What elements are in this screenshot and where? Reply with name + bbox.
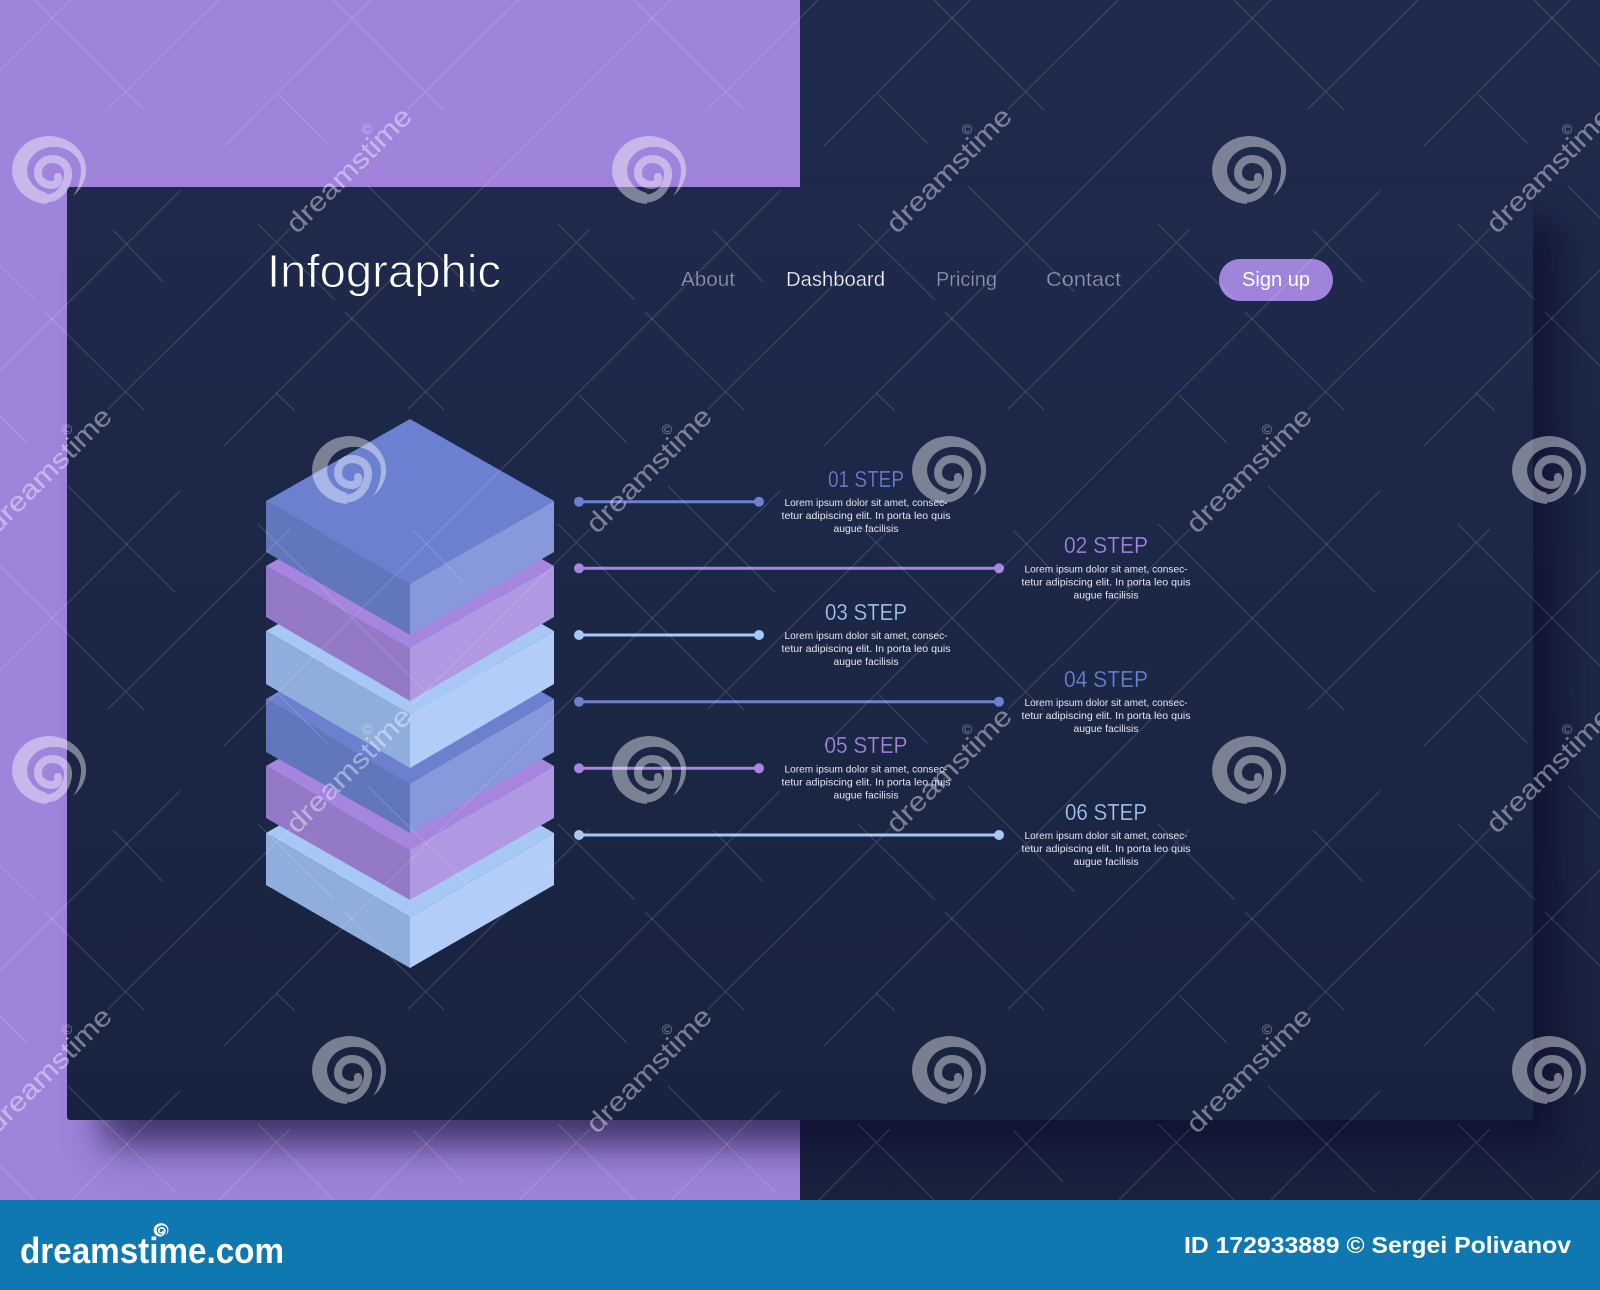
step 01: tetur adipiscing elit. In porta leo quis [782,510,950,522]
layer 1 [266,419,554,635]
step 05: Lorem ipsum dolor sit amet, consec- [784,764,948,776]
step 02: augue facilisis [1074,590,1138,602]
watermark: dreamstime text: dreamstime [1180,1001,1318,1139]
step 02: 02 STEP [1064,532,1148,558]
watermark: dreamstime text: dreamstime [880,701,1018,839]
step 03: 03 STEP [825,599,907,625]
watermark: dreamstime text: dreamstime [1480,101,1600,239]
step 04: augue facilisis [1074,723,1138,735]
step 06 [574,799,1190,868]
step 01 [574,466,950,535]
isometric layer stack [266,419,554,968]
step 03: tetur adipiscing elit. In porta leo quis [782,643,950,655]
watermark: dreamstime text: dreamstime [1480,701,1600,839]
step 06: augue facilisis [1074,856,1138,868]
watermark: dreamstime text: © [362,721,373,737]
navigation menu: About [681,269,735,291]
layer 6 [266,750,554,968]
watermark: dreamstime text: © [62,421,73,437]
watermark: dreamstime text: © [1262,1021,1273,1037]
step 04: tetur adipiscing elit. In porta leo quis [1022,710,1190,722]
step 06: tetur adipiscing elit. In porta leo quis [1022,843,1190,855]
watermark: dreamstime text: dreamstime [1180,401,1318,539]
layer 5 [266,683,554,900]
step 03 [574,599,950,668]
watermark: dreamstime text: © [962,721,973,737]
watermark: dreamstime text: © [1262,421,1273,437]
step 05: tetur adipiscing elit. In porta leo quis [782,776,950,788]
step 03: augue facilisis [834,656,898,668]
button: sign up [1219,259,1333,301]
step 05: 05 STEP [824,732,908,758]
watermark: spirals [12,136,1586,1104]
step 02: Lorem ipsum dolor sit amet, consec- [1024,564,1188,576]
watermark: dreamstime text: dreamstime [580,1001,718,1139]
button: sign up: Sign up [1242,269,1310,291]
watermark: dreamstime text: © [662,421,673,437]
watermark: dreamstime text: dreamstime [280,101,418,239]
watermark: dreamstime text: © [62,1021,73,1037]
watermark: dreamstime text: dreamstime [580,401,718,539]
panel: main dark card [67,187,1533,1120]
step 01: 01 STEP [828,466,904,492]
navigation menu: Contact [1046,269,1121,291]
footer logo: dreamstime.com [20,1230,284,1271]
step 04: 04 STEP [1064,666,1148,692]
step 02 [574,532,1190,602]
watermark: dreamstime text: © [962,121,973,137]
step 05: augue facilisis [834,790,898,802]
watermark: dreamstime text: dreamstime [880,101,1018,239]
layer 2 [266,483,554,701]
layer 4 [266,616,554,833]
background: purple field [0,0,800,1200]
step 01: augue facilisis [834,523,898,535]
step 02: tetur adipiscing elit. In porta leo quis [1022,576,1190,588]
step 03: Lorem ipsum dolor sit amet, consec- [784,630,948,642]
step 06: Lorem ipsum dolor sit amet, consec- [1024,830,1188,842]
navigation menu: Dashboard [786,269,885,291]
watermark: dreamstime text: © [1562,121,1573,137]
layer 3 [266,548,554,768]
step 05 [574,732,950,802]
footer band [0,1200,1600,1290]
footer image id and credit: ID 172933889 © Sergei Polivanov [1184,1232,1571,1258]
watermark: dreamstime text: © [662,1021,673,1037]
navigation menu [681,269,1121,291]
step 06: 06 STEP [1065,799,1147,825]
title: Infographic [267,245,501,297]
navigation menu: Pricing [936,269,997,291]
watermark: dreamstime text: dreamstime [280,701,418,839]
step 04 [574,666,1190,735]
watermark: dreamstime text: © [362,121,373,137]
watermark: dreamstime text: © [1562,721,1573,737]
step 04: Lorem ipsum dolor sit amet, consec- [1024,697,1188,709]
step 01: Lorem ipsum dolor sit amet, consec- [784,497,948,509]
